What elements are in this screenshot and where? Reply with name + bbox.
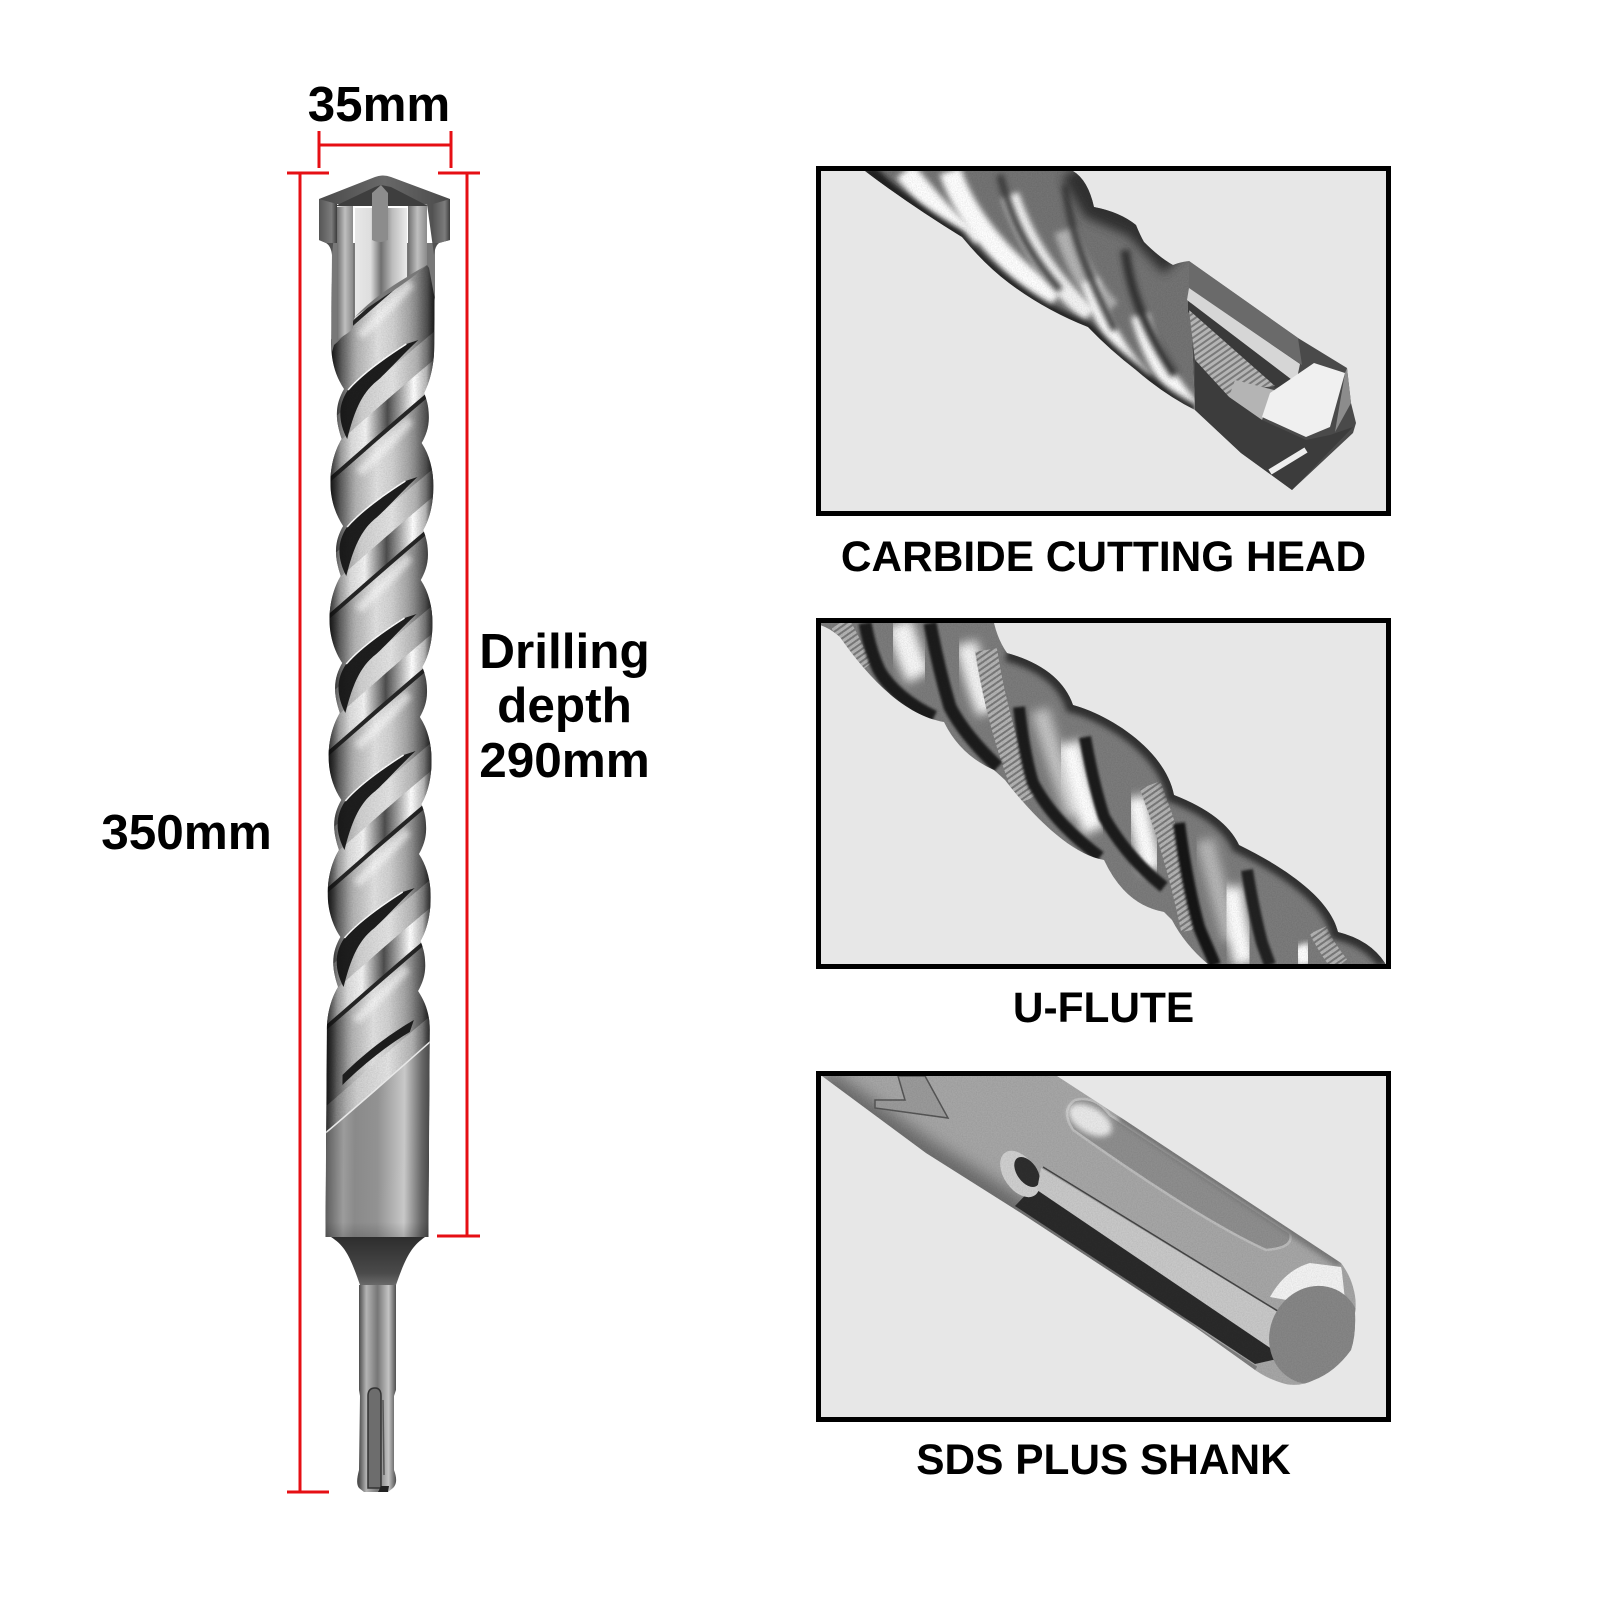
- dimension: drilling depth 290mm: 290mm: [479, 733, 650, 788]
- caption: u-flute: U-FLUTE: [1013, 984, 1194, 1031]
- caption: sds plus shank: SDS PLUS SHANK: [916, 1436, 1291, 1483]
- carbide head: [319, 176, 450, 255]
- dimension: 350mm: 350mm: [101, 805, 272, 860]
- dimension: drilling depth 290mm: [437, 173, 650, 1236]
- dimension: drilling depth 290mm: Drilling: [479, 624, 650, 679]
- dimension: 35mm: [308, 77, 451, 168]
- cutting head detail: [1187, 261, 1356, 490]
- caption: carbide cutting head: CARBIDE CUTTING HEAD: [841, 533, 1366, 580]
- drill bit illustration: [316, 176, 450, 1492]
- dimension: 35mm: 35mm: [308, 77, 450, 132]
- dimension: 350mm: [101, 173, 329, 1492]
- panel: sds plus shank: [815, 1070, 1390, 1420]
- dimension: drilling depth 290mm: depth: [497, 678, 632, 733]
- upper shaft: [332, 243, 435, 352]
- SDS shank: [357, 1285, 396, 1492]
- flute section: [326, 254, 435, 1237]
- panel: u-flute: [815, 620, 1390, 966]
- neck taper: [331, 1237, 425, 1285]
- panel: carbide cutting head: [818, 165, 1388, 514]
